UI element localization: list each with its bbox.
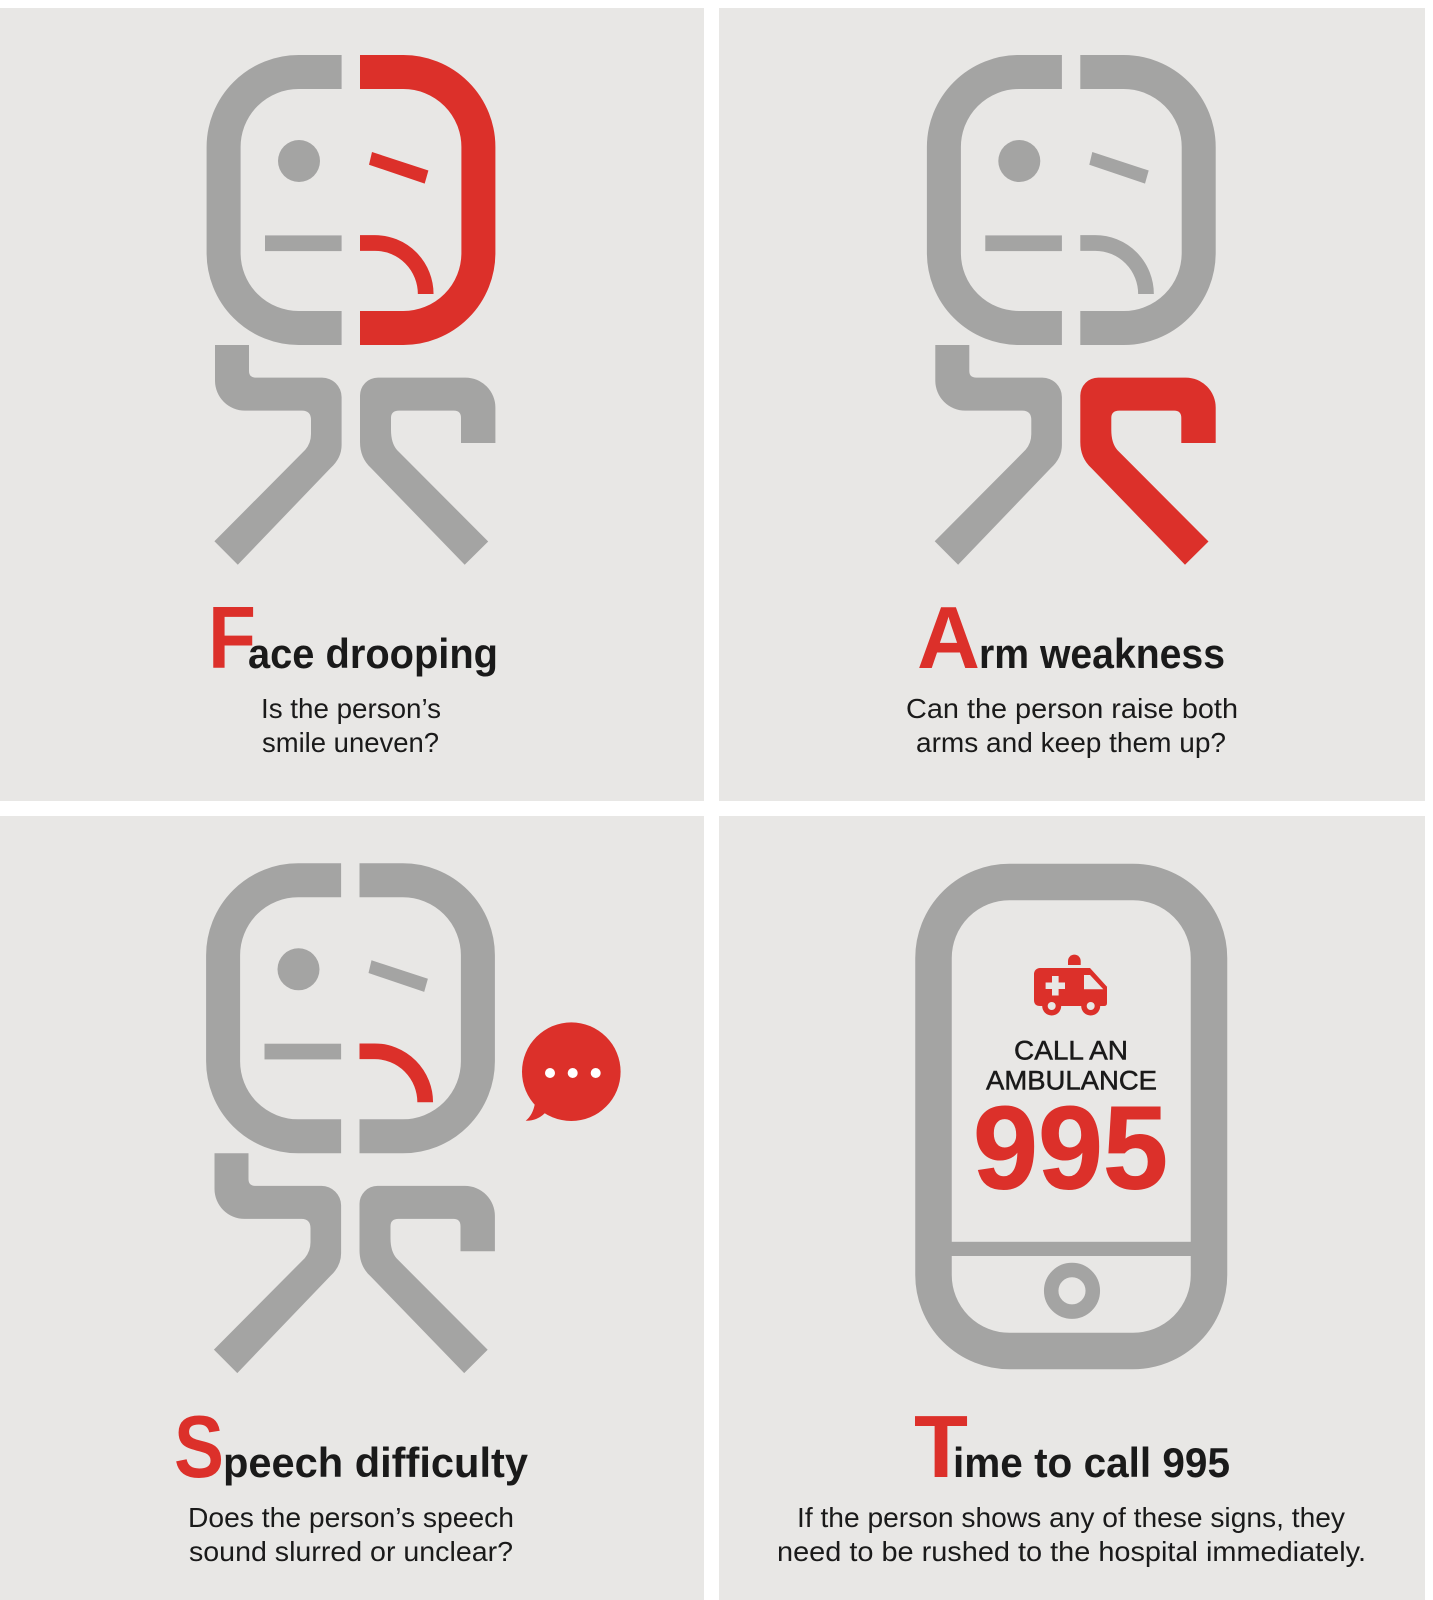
left eye <box>278 140 320 182</box>
icon: smartphone <box>933 882 1210 1351</box>
icon: ambulance <box>1034 955 1107 1016</box>
mouth left <box>264 1044 341 1059</box>
question text: Does the person’s speech <box>188 1502 514 1533</box>
left arm <box>214 345 342 565</box>
phone text: call an ambulance <box>986 1035 1157 1095</box>
heading: Face drooping: ace drooping <box>248 630 498 677</box>
question text: Can the person raise both <box>906 693 1238 724</box>
question text: smile uneven? <box>262 727 439 758</box>
mouth left <box>265 235 342 251</box>
body text: need to be rushed to the hospital immediately. <box>777 1536 1366 1567</box>
left eye <box>278 948 320 990</box>
right arm <box>360 378 495 565</box>
head left half <box>944 72 1062 328</box>
mouth right <box>360 243 426 294</box>
right eye drooping <box>369 152 428 184</box>
question text: arms and keep them up? <box>916 727 1226 758</box>
left arm <box>935 345 1062 565</box>
mouth left <box>985 235 1062 251</box>
heading: Time to call 995 <box>914 1397 1230 1496</box>
heading: Face drooping <box>208 588 498 687</box>
body text: If the person shows any of these signs, they <box>797 1502 1345 1533</box>
mouth right highlighted <box>360 1051 425 1102</box>
question text: sound slurred or unclear? <box>189 1536 513 1567</box>
heading: Speech difficulty: peech difficulty <box>223 1439 529 1486</box>
left eye <box>998 140 1040 182</box>
right eye <box>368 960 428 992</box>
figure: person with drooping face <box>214 72 495 565</box>
heading: Face drooping: F <box>208 588 256 687</box>
question text: Is the person’s <box>261 693 441 724</box>
phone text: call an ambulance: AMBULANCE <box>986 1065 1157 1095</box>
right eye <box>1089 152 1149 184</box>
heading: Arm weakness <box>917 588 1225 687</box>
mouth right <box>1080 243 1146 294</box>
phone text: call an ambulance: CALL AN <box>1014 1035 1128 1065</box>
heading: Time to call 995: T <box>914 1397 968 1496</box>
panel: face drooping <box>0 8 704 801</box>
panel: arm weakness <box>719 8 1425 801</box>
body text <box>777 1502 1366 1567</box>
panel: time to call 995 <box>719 816 1425 1600</box>
figure: person with weak arm <box>935 72 1216 565</box>
head right half <box>360 880 478 1136</box>
head left half <box>224 72 342 328</box>
heading: Time to call 995: ime to call 995 <box>953 1439 1230 1486</box>
head left half <box>223 880 341 1136</box>
heading: Arm weakness: A <box>917 588 980 687</box>
left arm <box>214 1153 341 1373</box>
question text <box>906 693 1238 758</box>
right arm highlighted <box>1080 378 1216 565</box>
question text <box>261 693 441 758</box>
figure: person with speech difficulty <box>214 880 495 1373</box>
phone number: 995: 995 <box>973 1082 1168 1214</box>
heading: Speech difficulty: S <box>174 1397 224 1496</box>
head right half <box>360 72 478 328</box>
panel: speech difficulty <box>0 816 704 1600</box>
head right half <box>1080 72 1199 328</box>
heading: Arm weakness: rm weakness <box>979 630 1225 677</box>
question text <box>188 1502 514 1567</box>
icon: speech bubble <box>522 1022 621 1121</box>
right arm <box>359 1186 495 1373</box>
heading: Speech difficulty <box>174 1397 529 1496</box>
